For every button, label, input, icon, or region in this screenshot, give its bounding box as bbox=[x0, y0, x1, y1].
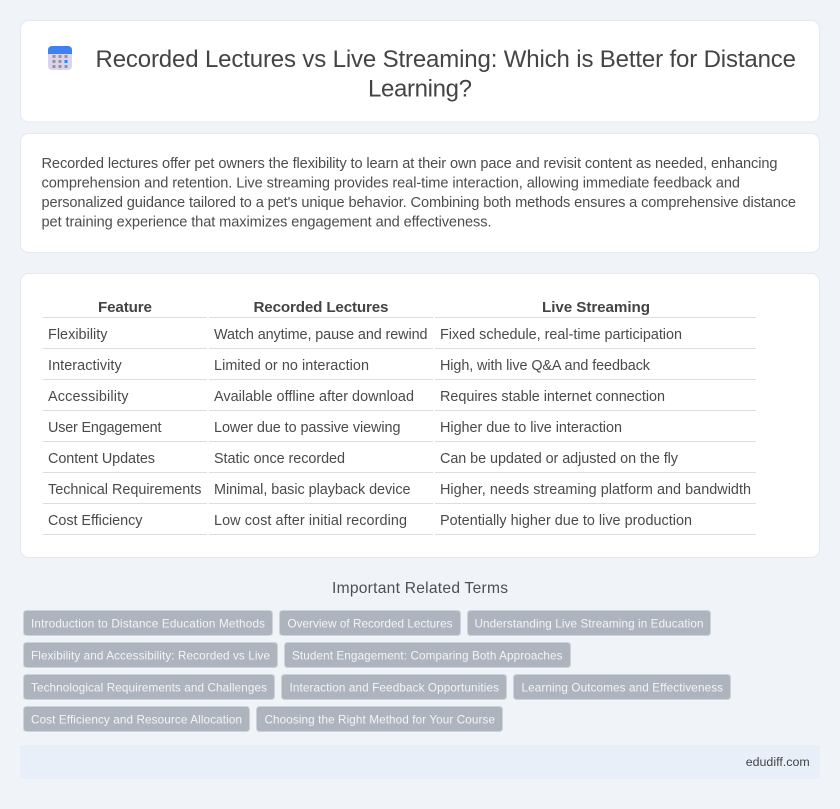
tag: cost bbox=[24, 706, 250, 732]
table row: content updates: Can be updated or adjusted on the fly bbox=[440, 451, 679, 467]
table row: user engagement: Lower due to passive viewing bbox=[214, 420, 400, 436]
text block: intro paragraph: comprehension and retention. Live streaming provides real-time interaction, allowing immediate feedback and bbox=[42, 176, 740, 192]
tag: interaction bbox=[282, 674, 506, 700]
table row: technical requirements: Technical Requirements bbox=[48, 482, 202, 498]
text block: intro paragraph: pet training experience that maximizes engagement and effectiveness. bbox=[42, 214, 492, 230]
title bbox=[96, 46, 796, 102]
panel: header bbox=[20, 20, 820, 122]
tag: flexibility bbox=[24, 642, 278, 668]
table row: content updates: Content Updates bbox=[48, 451, 155, 467]
tag: choosing: Choosing the Right Method for Your Course bbox=[264, 714, 495, 726]
tag: introduction bbox=[24, 610, 272, 636]
tag: technological bbox=[24, 674, 274, 700]
table row: flexibility: Watch anytime, pause and rewind bbox=[214, 327, 428, 343]
tag: choosing bbox=[256, 706, 502, 732]
table row: user engagement: User Engagement bbox=[48, 420, 162, 436]
table row: cost efficiency bbox=[43, 513, 756, 534]
title: Recorded Lectures vs Live Streaming: Which is Better for Distance bbox=[96, 46, 796, 73]
icon: calendar bbox=[48, 46, 72, 70]
text block: intro paragraph: Recorded lectures offer pet owners the flexibility to learn at their own pace and revisit content as needed, enhancing bbox=[42, 156, 778, 172]
tag: technological: Technological Requirements and Challenges bbox=[31, 682, 267, 694]
text block: intro paragraph bbox=[42, 156, 796, 230]
tag: overview: Overview of Recorded Lectures bbox=[288, 618, 453, 630]
table row: cost efficiency: Low cost after initial recording bbox=[214, 513, 407, 529]
tag: outcomes bbox=[514, 674, 730, 700]
table row: technical requirements: Minimal, basic playback device bbox=[214, 482, 410, 498]
table row: interactivity: High, with live Q&A and feedback bbox=[440, 358, 651, 374]
table row: accessibility: Available offline after download bbox=[214, 389, 414, 405]
footer bbox=[20, 745, 820, 779]
table row: accessibility bbox=[43, 389, 756, 410]
table row: cost efficiency: Cost Efficiency bbox=[48, 513, 143, 529]
table row: interactivity: Limited or no interaction bbox=[214, 358, 369, 374]
table row: flexibility bbox=[43, 327, 756, 348]
tag: engagement bbox=[284, 642, 570, 668]
table row: cost efficiency: Potentially higher due to live production bbox=[440, 513, 692, 529]
table row: accessibility: Accessibility bbox=[48, 389, 129, 405]
tag: overview bbox=[280, 610, 460, 636]
tag: flexibility: Flexibility and Accessibility: Recorded vs Live bbox=[31, 650, 270, 662]
tag: interaction: Interaction and Feedback Opportunities bbox=[290, 682, 499, 694]
table row: interactivity bbox=[43, 358, 756, 380]
table row: technical requirements: Higher, needs streaming platform and bandwidth bbox=[440, 482, 751, 498]
table row: flexibility: Fixed schedule, real-time participation bbox=[440, 327, 682, 343]
tag: outcomes: Learning Outcomes and Effectiveness bbox=[522, 682, 723, 694]
table row: interactivity: Interactivity bbox=[48, 358, 122, 374]
tag: introduction: Introduction to Distance Education Methods bbox=[31, 618, 265, 630]
panel: related term tags bbox=[24, 610, 730, 732]
footer credit: edudiff.com bbox=[746, 755, 810, 769]
tag: live streaming: Understanding Live Streaming in Education bbox=[474, 618, 704, 630]
table header row: Recorded Lectures bbox=[254, 299, 388, 316]
tag: engagement: Student Engagement: Comparing Both Approaches bbox=[292, 650, 563, 662]
panel: introduction bbox=[20, 134, 820, 252]
table row: content updates bbox=[43, 451, 756, 472]
table row: technical requirements bbox=[43, 482, 756, 504]
title: Learning? bbox=[368, 76, 472, 102]
table row: user engagement: Higher due to live interaction bbox=[440, 420, 622, 436]
table row: content updates: Static once recorded bbox=[214, 451, 345, 467]
table row: flexibility: Flexibility bbox=[48, 327, 108, 343]
panel: comparison table bbox=[20, 274, 820, 558]
table row: user engagement bbox=[43, 420, 756, 442]
table header row bbox=[43, 299, 756, 318]
tag: live streaming bbox=[468, 610, 710, 636]
text block: intro paragraph: personalized guidance tailored to a pet's unique behavior. Combining both methods ensures a comprehensive distance bbox=[42, 195, 796, 211]
heading: related terms: Important Related Terms bbox=[332, 580, 508, 597]
table header row: Feature bbox=[98, 299, 152, 316]
table row: accessibility: Requires stable internet connection bbox=[440, 389, 665, 405]
table header row: Live Streaming bbox=[542, 299, 650, 316]
tag: cost: Cost Efficiency and Resource Allocation bbox=[31, 714, 242, 726]
